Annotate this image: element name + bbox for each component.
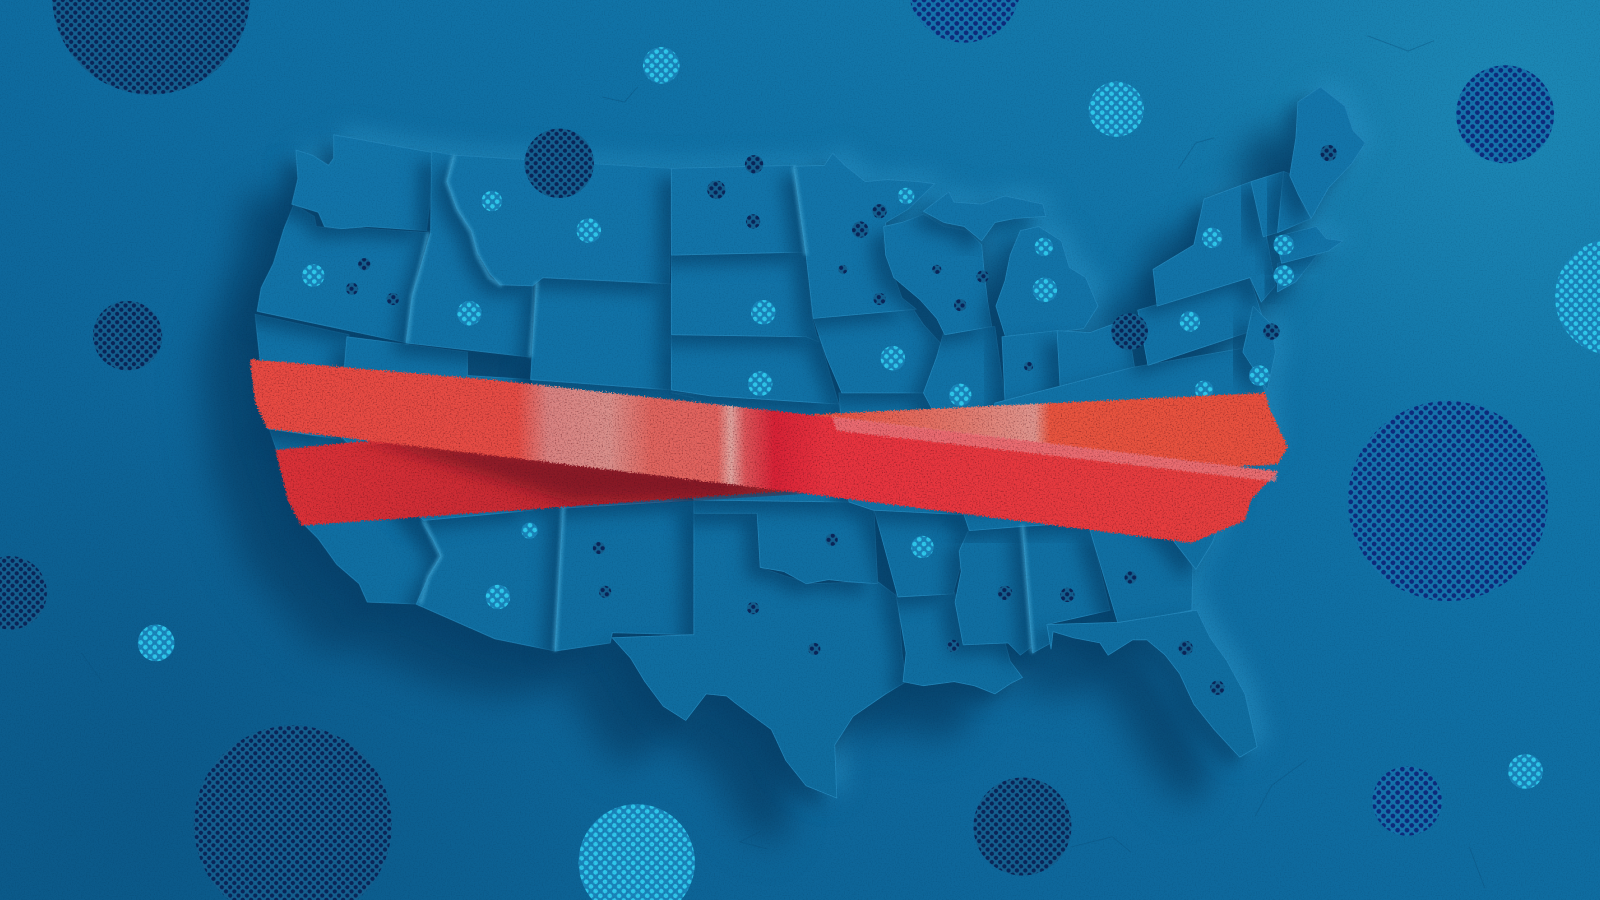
state: Michigan upper peninsula (923, 192, 1046, 241)
state: Idaho (406, 151, 533, 357)
state: Illinois (923, 327, 1005, 459)
state: Arizona (416, 505, 563, 651)
dark circle bottom left (194, 725, 392, 900)
state: Kentucky and Virginia (969, 347, 1270, 502)
state: Georgia (1088, 522, 1193, 624)
state: Texas (612, 510, 906, 798)
state: Indiana (1002, 331, 1061, 449)
state: Utah (339, 337, 533, 520)
state: Alabama (1022, 518, 1110, 653)
state: Wisconsin (884, 214, 992, 335)
cyan circle right edge (1555, 240, 1600, 354)
cyan circle bottom (579, 804, 695, 900)
dark circle left (93, 301, 162, 370)
state: Tennessee (959, 490, 1204, 531)
state: Ohio (1057, 324, 1139, 449)
map cast shadow (255, 87, 1365, 798)
shadow on lower tape (347, 434, 816, 502)
state: Maine (1290, 87, 1365, 218)
state: New Mexico (555, 498, 696, 651)
state: Oregon (257, 204, 429, 343)
red tape crossing over the map (250, 359, 1288, 543)
state: Kansas (671, 393, 849, 502)
state: Montana (447, 155, 671, 286)
state: Mississippi (955, 524, 1037, 655)
cyan state dots (302, 188, 1294, 609)
navy circle top (910, 0, 1019, 43)
navy state dots (346, 145, 1337, 695)
state: Arkansas (873, 507, 978, 597)
state: Minnesota (794, 153, 935, 318)
state: Washington (292, 135, 436, 231)
state: Louisiana (896, 592, 1022, 694)
dark circle over Montana (524, 129, 594, 198)
state: North Dakota (671, 165, 806, 255)
upper tape strip (250, 359, 1278, 543)
lower tape strip (276, 393, 1288, 526)
cyan circle upper right (1089, 82, 1144, 137)
dark circle top left (52, 0, 250, 94)
state: Oklahoma (694, 498, 878, 584)
large navy circle right (1348, 401, 1548, 601)
state: New Hampshire (1278, 171, 1311, 233)
dark circle far left (0, 556, 47, 630)
navy circle lower right (1372, 766, 1442, 836)
state: Florida (1047, 610, 1257, 757)
state: South Carolina (1143, 510, 1224, 569)
cyan circle top (643, 47, 680, 84)
navy circle bottom centre (973, 778, 1071, 876)
state: Wyoming (531, 278, 671, 390)
state: Colorado (531, 357, 696, 508)
state: Massachusetts (1276, 227, 1343, 263)
navy circle top right (1456, 65, 1554, 163)
lit ridge highlights on state borders (407, 155, 1033, 653)
state: Missouri (839, 393, 978, 515)
state: New York (1153, 182, 1276, 306)
state: Nevada (255, 314, 427, 520)
state: Vermont (1251, 171, 1284, 237)
cyan circle lower right (1508, 754, 1543, 789)
state: New Jersey and Delaware (1243, 306, 1276, 390)
halftone dots on the map (302, 129, 1337, 695)
state: Michigan lower peninsula (996, 227, 1098, 339)
map of states (255, 87, 1365, 798)
state: South Dakota (671, 252, 818, 342)
state: Pennsylvania (1138, 278, 1265, 365)
cyan circle left (138, 624, 174, 661)
state: California (267, 423, 441, 604)
state: Nebraska (671, 335, 839, 404)
map glow edge (255, 87, 1365, 798)
state: Connecticut and Rhode Island (1278, 251, 1320, 292)
state: Iowa (813, 309, 944, 393)
